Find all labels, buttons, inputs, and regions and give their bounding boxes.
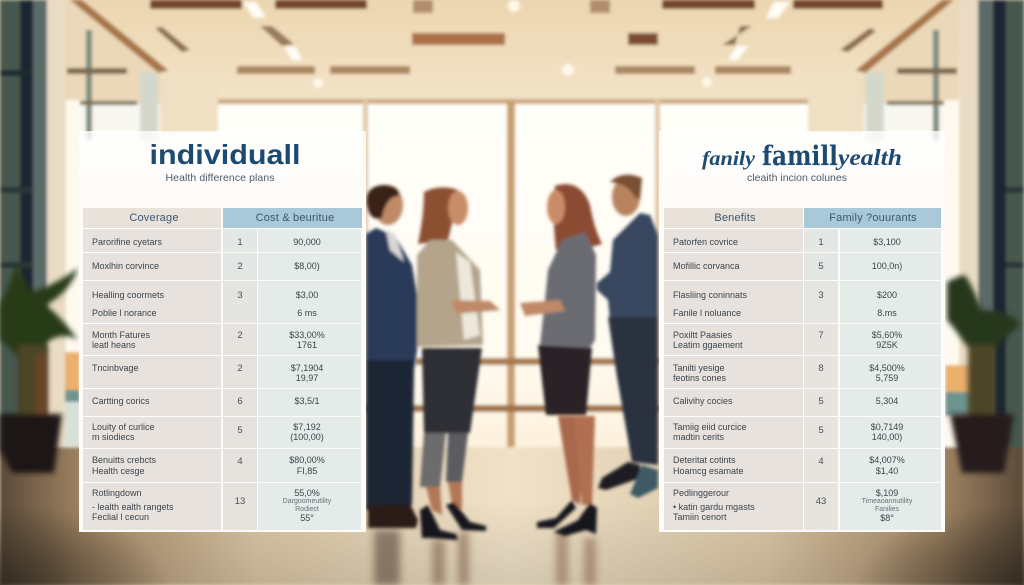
comparison table: $3,100 bbox=[873, 237, 901, 247]
comparison table: 100,0n) bbox=[872, 261, 902, 271]
comparison table: 5,304 bbox=[876, 396, 898, 406]
comparison table: 13 bbox=[235, 496, 245, 507]
comparison table: 3 bbox=[237, 290, 243, 301]
comparison table: $7,192 bbox=[293, 422, 321, 432]
comparison table: Pedlinggerour bbox=[673, 488, 729, 498]
comparison table: Healling coormets bbox=[92, 290, 165, 300]
comparison table: $8° bbox=[880, 513, 894, 523]
comparison table: 5 bbox=[818, 425, 824, 436]
comparison table: Poblie l norance bbox=[92, 308, 157, 318]
comparison table: 140,00) bbox=[872, 432, 902, 442]
comparison table: Tanilti yesige bbox=[673, 363, 725, 373]
comparison table: 4 bbox=[818, 456, 824, 467]
comparison table: • katin gardu mgasts bbox=[673, 502, 755, 512]
comparison table: $8,00) bbox=[294, 261, 320, 271]
right plant in dark pot bbox=[947, 275, 1020, 473]
comparison table: $33,00% bbox=[289, 330, 325, 340]
person: man in slate suit bbox=[597, 175, 658, 498]
comparison table: 1 bbox=[818, 237, 824, 248]
comparison table: $3,00 bbox=[296, 290, 318, 300]
comparison table: Louity of curlice bbox=[92, 422, 155, 432]
comparison table: Calivihy cocies bbox=[673, 396, 733, 406]
comparison table: $4,500% bbox=[869, 363, 905, 373]
comparison table: Month Fatures bbox=[92, 330, 151, 340]
comparison table: 5,759 bbox=[876, 373, 898, 383]
comparison table: Rodiect bbox=[295, 506, 319, 513]
comparison table: 2 bbox=[237, 261, 243, 272]
comparison table: 9Z5K bbox=[876, 340, 898, 350]
comparison table: Hoamcg esamate bbox=[673, 466, 744, 476]
comparison table: Family ?ouurants bbox=[829, 212, 917, 224]
comparison table: 5 bbox=[818, 396, 824, 407]
comparison table: $1,40 bbox=[876, 466, 898, 476]
comparison table: $0,7149 bbox=[871, 422, 903, 432]
subtitle: Health difference plans bbox=[166, 172, 274, 184]
comparison table: Benuitts crebcts bbox=[92, 455, 157, 465]
comparison table: 1 bbox=[237, 237, 243, 248]
comparison table: $3,5/1 bbox=[294, 396, 320, 406]
comparison table: 2 bbox=[237, 330, 243, 341]
comparison table: FI,85 bbox=[297, 466, 317, 476]
comparison table: Feclial l cecun bbox=[92, 512, 149, 522]
comparison table: 2 bbox=[237, 363, 243, 374]
comparison table: 4 bbox=[237, 456, 243, 467]
panel: family health plans bbox=[659, 131, 945, 532]
comparison table: feotins cones bbox=[673, 373, 727, 383]
comparison table: Cartting corics bbox=[92, 396, 150, 406]
comparison table: $80,00% bbox=[289, 455, 325, 465]
comparison table: Fanile l noluance bbox=[673, 308, 741, 318]
title: yealth bbox=[835, 145, 902, 170]
comparison table: $4,007% bbox=[869, 455, 905, 465]
comparison table: 6 bbox=[237, 396, 243, 407]
comparison table: Tamiig eiid curcice bbox=[673, 422, 747, 432]
comparison table: $200 bbox=[877, 290, 897, 300]
comparison table: - lealth ealth rangets bbox=[92, 502, 174, 512]
comparison table: Moxlhin corvince bbox=[92, 261, 159, 271]
comparison table: Mofillic corvanca bbox=[673, 261, 740, 271]
comparison table: $,109 bbox=[876, 488, 898, 498]
comparison table: 5 bbox=[818, 261, 824, 272]
title: fanily bbox=[702, 148, 755, 170]
ceiling panels and lights bbox=[150, 0, 883, 104]
comparison table: Coverage bbox=[129, 212, 179, 224]
comparison table bbox=[83, 208, 362, 530]
comparison table: Rotlingdown bbox=[92, 488, 142, 498]
floor corner shadows bbox=[0, 505, 1024, 585]
comparison table: Leatim ggaement bbox=[673, 340, 743, 350]
comparison table: 3 bbox=[818, 290, 824, 301]
wood floor bbox=[0, 447, 1024, 585]
comparison table: $7,1904 bbox=[291, 363, 323, 373]
person: man in navy suit bbox=[366, 185, 418, 528]
comparison table: Tamiin cenort bbox=[673, 512, 727, 522]
comparison table: Patorfen covrice bbox=[673, 237, 738, 247]
comparison table: Deteritat cotints bbox=[673, 455, 736, 465]
left wall and side window bbox=[0, 0, 218, 470]
comparison table: 5 bbox=[237, 425, 243, 436]
comparison table: 55° bbox=[300, 513, 314, 523]
comparison table: Dargoomeutility bbox=[283, 498, 332, 505]
comparison table: 19,97 bbox=[296, 373, 318, 383]
comparison table: Health cesge bbox=[92, 466, 145, 476]
comparison table bbox=[664, 208, 941, 530]
comparison table: madtin cerits bbox=[673, 432, 725, 442]
comparison table: Benefits bbox=[714, 212, 756, 224]
comparison table: 43 bbox=[816, 496, 826, 507]
panel: individual health plans bbox=[79, 131, 366, 532]
comparison table: 55,0% bbox=[294, 488, 320, 498]
comparison table: (100,00) bbox=[290, 432, 324, 442]
title: famill bbox=[762, 141, 838, 172]
central window frame bbox=[363, 100, 660, 480]
comparison table: 8 bbox=[818, 363, 824, 374]
subtitle: cleaith incion colunes bbox=[747, 172, 847, 184]
comparison table: 1761 bbox=[297, 340, 317, 350]
comparison table: Parorifine cyetars bbox=[92, 237, 163, 247]
right wall and side window bbox=[808, 0, 1024, 470]
person: woman in beige blazer bbox=[417, 187, 500, 540]
comparison table: leatl heans bbox=[92, 340, 136, 350]
comparison table: 7 bbox=[818, 330, 824, 341]
comparison table: 8.ms bbox=[877, 308, 897, 318]
comparison table: Cost & beuritue bbox=[256, 212, 334, 224]
comparison table: $5,60% bbox=[872, 330, 902, 340]
comparison table: Fanilies bbox=[875, 506, 900, 513]
comparison table: Flasliing coninnats bbox=[673, 290, 748, 300]
comparison table: 90,000 bbox=[293, 237, 321, 247]
comparison table: Poxiltt Paasies bbox=[673, 330, 733, 340]
floor reflections of the people bbox=[374, 530, 596, 585]
person: woman in grey blazer and dark skirt bbox=[520, 184, 602, 536]
comparison table: 6 ms bbox=[297, 308, 317, 318]
comparison table: m siodiecs bbox=[92, 432, 135, 442]
comparison table: Timeaoannutility bbox=[862, 498, 913, 505]
left plant in dark pot bbox=[0, 262, 78, 473]
people: group of four colleagues talking bbox=[366, 175, 658, 540]
comparison table: Tncinbvage bbox=[92, 363, 139, 373]
title: individuall bbox=[150, 139, 300, 170]
